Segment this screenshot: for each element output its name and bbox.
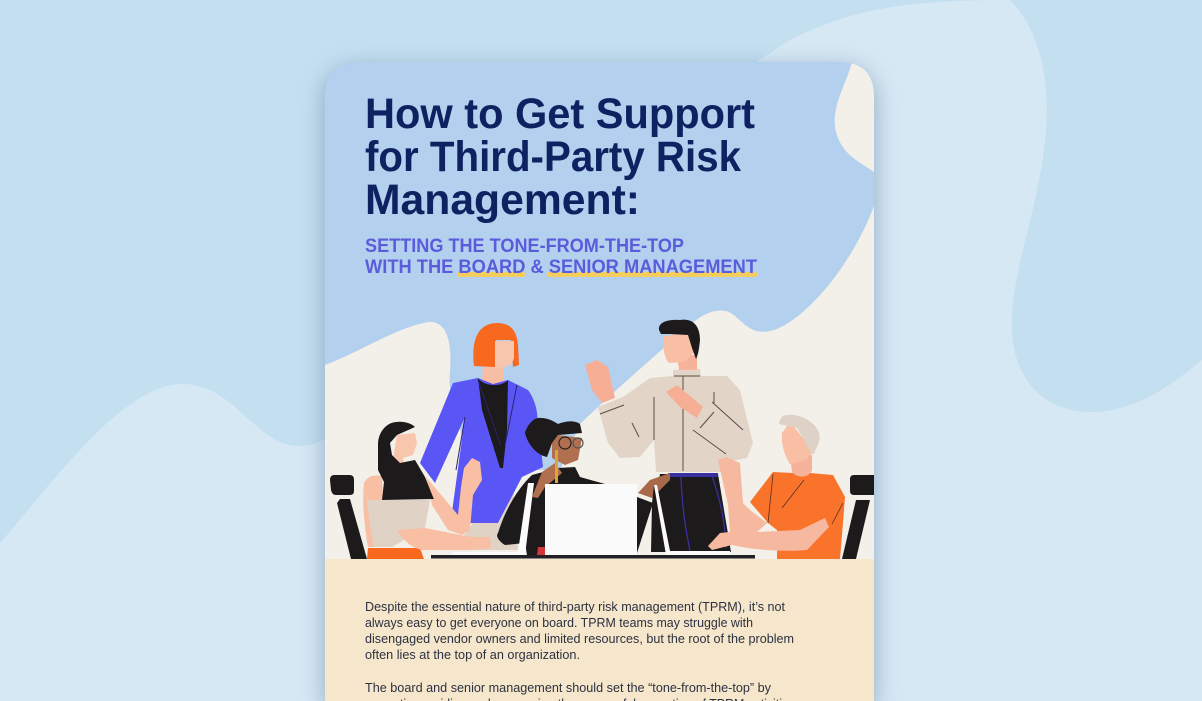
person: seated person with glasses xyxy=(452,418,605,555)
person: standing man xyxy=(585,320,753,552)
top xyxy=(366,500,430,547)
title: How to Get Support xyxy=(365,90,755,138)
shirt xyxy=(598,369,753,472)
body text: Despite the essential nature of third-party risk management (TPRM), it’s not xyxy=(365,599,785,614)
head xyxy=(394,433,417,463)
table xyxy=(431,555,755,558)
person: seated man in orange shirt xyxy=(708,415,874,559)
chair xyxy=(842,475,874,559)
title: Management: xyxy=(365,176,640,224)
panel: body background xyxy=(325,559,874,701)
arm xyxy=(708,457,829,551)
hair xyxy=(378,422,434,500)
subtitle xyxy=(365,236,757,278)
highlight: senior management xyxy=(547,272,757,277)
chair xyxy=(330,475,367,559)
highlight: board xyxy=(457,272,525,277)
body text: The board and senior management should set the “tone-from-the-top” by xyxy=(365,680,771,695)
subtitle text: SETTING THE TONE-FROM-THE-TOP xyxy=(365,236,684,257)
body text: often lies at the top of an organization. xyxy=(365,647,580,662)
head and neck xyxy=(677,355,697,370)
subtitle text xyxy=(365,238,757,273)
cream backdrop shape xyxy=(325,206,874,560)
body text: always easy to get everyone on board. TPRM teams may struggle with xyxy=(365,615,753,630)
subtitle text: WITH THE BOARD & SENIOR MANAGEMENT xyxy=(365,257,757,278)
title: for Third-Party Risk xyxy=(365,133,741,181)
body text: disengaged vendor owners and limited resources, but the root of the problem xyxy=(365,631,794,646)
trousers xyxy=(652,474,731,552)
person: seated woman xyxy=(330,422,491,559)
laptop: dark side xyxy=(637,497,653,553)
illustration: team meeting xyxy=(330,320,874,559)
body text xyxy=(365,599,795,701)
person: standing woman with orange hair xyxy=(420,323,543,550)
panel: blue header xyxy=(325,62,874,470)
laptop xyxy=(545,484,637,555)
panel: infographic card xyxy=(325,62,874,701)
title xyxy=(365,90,755,224)
shoulder and arms xyxy=(363,476,383,547)
hand on waist xyxy=(638,473,670,498)
hair xyxy=(659,320,700,359)
hands xyxy=(585,360,615,403)
cream corner shape xyxy=(835,62,874,172)
card shadow xyxy=(322,66,877,701)
